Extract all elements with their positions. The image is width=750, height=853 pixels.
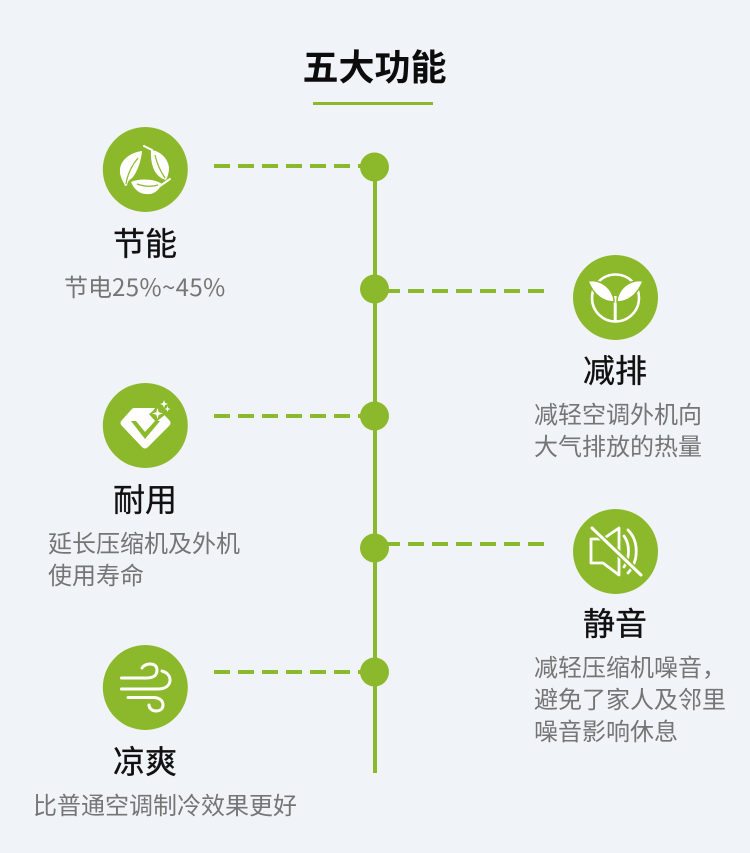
- heading: 凉爽: 凉爽: [113, 737, 177, 783]
- timeline spine: [373, 167, 377, 773]
- title underline: [313, 102, 433, 105]
- text: 静音 description: 避免了家人及邻里: [534, 680, 726, 715]
- text: 静音 description: 噪音影响休息: [534, 712, 678, 747]
- heading: 节能: 节能: [113, 219, 177, 265]
- node 3: [360, 402, 389, 430]
- connector: 凉爽: [214, 670, 374, 674]
- connector: 耐用: [214, 414, 374, 418]
- text: 静音 description: [534, 648, 726, 747]
- text: 节能 description: 节电25%~45%: [64, 268, 226, 303]
- text: 耐用 description: 延长压缩机及外机: [48, 524, 240, 559]
- text: 减排 description: 大气排放的热量: [534, 427, 702, 462]
- icon: leaves: [103, 127, 188, 212]
- icon: muted speaker: [573, 509, 658, 594]
- title: 五大功能: [302, 39, 447, 91]
- icon: sprout: [573, 255, 658, 340]
- connector: 减排: [374, 289, 544, 293]
- node 1: [360, 152, 389, 182]
- node 4: [360, 534, 389, 562]
- text: 减排 description: 减轻空调外机向: [534, 395, 702, 430]
- connector: 节能: [214, 164, 374, 168]
- heading: 静音: 静音: [583, 599, 647, 645]
- heading: 减排: 减排: [583, 346, 647, 392]
- icon: diamond: [103, 383, 188, 468]
- connector: 静音: [374, 542, 544, 546]
- text: 静音 description: 减轻压缩机噪音，: [534, 648, 726, 683]
- heading: 耐用: 耐用: [113, 475, 177, 521]
- text: 耐用 description: 使用寿命: [48, 556, 144, 591]
- icon: wind: [103, 645, 188, 730]
- node 5: [360, 658, 389, 686]
- text: 减排 description: [534, 395, 702, 462]
- text: 耐用 description: [48, 524, 240, 591]
- node 2: [360, 274, 389, 304]
- text: 凉爽 description: 比普通空调制冷效果更好: [33, 786, 297, 821]
